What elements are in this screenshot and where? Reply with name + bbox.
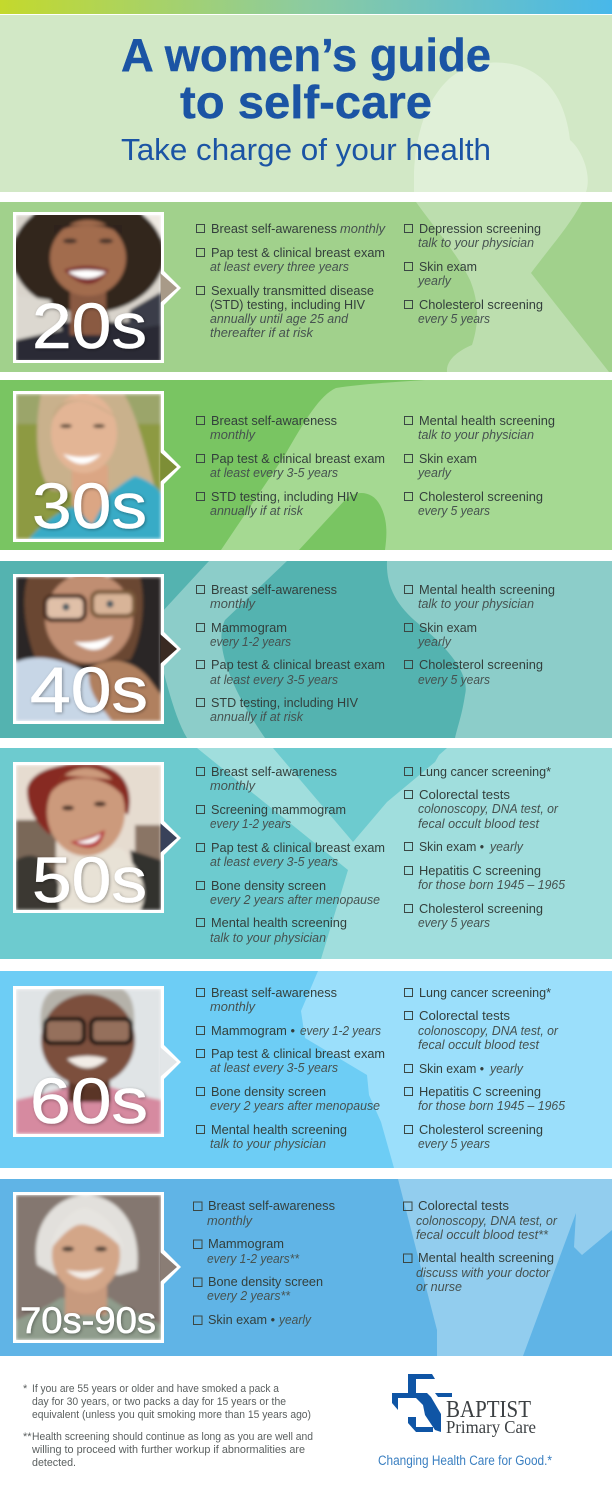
wordmark: BAPTIST [446, 1397, 531, 1423]
item: talk to your physician [418, 235, 534, 250]
checklist: 50s left [196, 764, 385, 945]
item: Breast self-awareness [208, 1198, 335, 1213]
item: Bone density screen [211, 878, 326, 893]
item [404, 787, 559, 831]
item [196, 764, 337, 793]
photo: woman in her 40s [13, 573, 181, 726]
silhouette: light shape [301, 971, 612, 1168]
item: talk to your physician [210, 930, 326, 945]
item: Pap test & clinical breast exam [211, 840, 385, 855]
footnote: lung cancer screening: day for 30 years, or two packs a day for 15 years or the [32, 1396, 286, 1408]
item: Pap test & clinical breast exam [211, 1046, 385, 1061]
item: Lung cancer screening* [419, 985, 551, 1000]
item: Cholesterol screening [419, 657, 543, 672]
item [404, 620, 477, 649]
subtitle: Take charge of your health [121, 132, 491, 167]
item: monthly [210, 778, 256, 793]
item: every 5 years [418, 1136, 490, 1151]
item: talk to your physician [418, 427, 534, 442]
top gradient bar [0, 0, 612, 14]
item [196, 489, 358, 518]
item: fecal occult blood test [418, 816, 540, 831]
item: every 5 years [418, 915, 490, 930]
item: Colorectal tests [419, 787, 511, 802]
item: yearly [278, 1312, 312, 1327]
footnote: health screening: ** [23, 1431, 32, 1443]
age label: 40s [30, 654, 148, 726]
item: colonoscopy, DNA test, or [418, 801, 559, 816]
footnote: health screening: willing to proceed with further workup if abnormalities are [31, 1444, 305, 1456]
item: Pap test & clinical breast exam [211, 451, 385, 466]
footnote: lung cancer screening: If you are 55 years or older and have smoked a pack a [32, 1383, 280, 1395]
footnote: health screening: detected. [32, 1457, 76, 1469]
silhouette: light shape [398, 1179, 612, 1356]
item [404, 451, 477, 480]
item: at least every 3-5 years [210, 854, 338, 869]
item: Mammogram [211, 620, 287, 635]
item [196, 1046, 385, 1075]
item: fecal occult blood test [418, 1037, 540, 1052]
item [404, 1084, 566, 1113]
age label: 50s [32, 844, 147, 916]
item [196, 878, 380, 907]
photo: woman in her 30s [13, 391, 181, 542]
item: every 1-2 years** [207, 1251, 300, 1266]
panel: 20s [0, 197, 612, 372]
item: Cholesterol screening [419, 297, 543, 312]
item [196, 915, 347, 945]
item: every 1-2 years [210, 634, 291, 649]
age label: 20s [32, 290, 147, 362]
item: monthly [207, 1213, 253, 1228]
item: Skin exam • [208, 1312, 275, 1327]
checklist: 40s left [196, 582, 385, 724]
item: thereafter if at risk [210, 325, 314, 340]
item: Mammogram [208, 1236, 284, 1251]
item: monthly [210, 427, 256, 442]
item: Breast self-awareness [211, 985, 337, 1000]
item: or nurse [416, 1279, 462, 1294]
footnote: lung cancer screening: equivalent (unless you quit smoking more than 15 years ago) [32, 1409, 311, 1421]
age label: 70s-90s [20, 1300, 156, 1341]
item [404, 863, 566, 892]
checklist: 40s right [404, 582, 555, 687]
item: Mental health screening [419, 582, 555, 597]
photo: woman in her 50s [13, 762, 181, 916]
item: every 1-2 years [210, 816, 291, 831]
item: STD testing, including HIV [211, 695, 358, 710]
item: for those born 1945 – 1965 [418, 1098, 566, 1113]
item: Hepatitis C screening [419, 1084, 541, 1099]
panel: 60s [0, 971, 612, 1168]
item: monthly [340, 221, 386, 236]
item: Pap test & clinical breast exam [211, 657, 385, 672]
item: yearly [417, 634, 452, 649]
footnote: lung cancer screening [23, 1383, 311, 1421]
footnote: health screening [23, 1431, 313, 1469]
silhouette: head in header [414, 63, 588, 192]
checklist: 70s right [404, 1198, 558, 1294]
item: Screening mammogram [211, 802, 346, 817]
silhouette: light shapes [150, 561, 612, 738]
item: annually if at risk [210, 503, 304, 518]
item: at least every three years [210, 259, 349, 274]
item [196, 985, 337, 1014]
title: to self-care [180, 76, 432, 128]
photo: woman in her 60s [13, 986, 181, 1137]
item: Breast self-awareness [211, 764, 337, 779]
item: at least every 3-5 years [210, 1060, 338, 1075]
item: every 2 years after menopause [210, 1098, 380, 1113]
item [404, 839, 524, 854]
checklist: 20s left [196, 221, 386, 340]
item: Bone density screen [208, 1274, 323, 1289]
item: every 5 years [418, 672, 490, 687]
item [404, 1061, 524, 1076]
item [196, 221, 386, 236]
item: Skin exam [419, 259, 477, 274]
item: Mental health screening [418, 1250, 554, 1265]
item: every 5 years [418, 503, 490, 518]
item: monthly [210, 596, 256, 611]
silhouette: light shapes [197, 748, 612, 959]
item [196, 1084, 380, 1113]
item: fecal occult blood test** [416, 1227, 549, 1242]
item: Bone density screen [211, 1084, 326, 1099]
item [404, 413, 555, 442]
item [404, 657, 543, 687]
item [404, 221, 541, 250]
checklist: 50s right [404, 764, 566, 930]
item: STD testing, including HIV [211, 489, 358, 504]
item: yearly [417, 465, 452, 480]
item: monthly [210, 999, 256, 1014]
logo: Baptist Primary Care [378, 1374, 553, 1468]
age label: 30s [32, 470, 147, 542]
item: Colorectal tests [419, 1008, 511, 1023]
item [196, 582, 337, 611]
panel: 50s [0, 748, 612, 959]
item [404, 582, 555, 611]
item: Colorectal tests [418, 1198, 510, 1213]
item: Cholesterol screening [419, 1122, 543, 1137]
item: Breast self-awareness [211, 221, 337, 236]
icon: cross and Florida [392, 1374, 452, 1432]
panel: 30s [0, 380, 612, 550]
silhouette: light shape [221, 380, 612, 550]
item: Lung cancer screening* [419, 764, 551, 779]
item: every 2 years** [207, 1288, 291, 1303]
item: Skin exam [419, 620, 477, 635]
item: Mental health screening [211, 1122, 347, 1137]
photo: woman in her 70s [13, 1192, 181, 1343]
item: Breast self-awareness [211, 582, 337, 597]
item [404, 1122, 543, 1151]
item: Skin exam • [419, 839, 484, 854]
item [404, 1008, 559, 1052]
item: Mental health screening [211, 915, 347, 930]
panel: header [0, 15, 612, 192]
item [196, 620, 291, 649]
item: Skin exam • [419, 1061, 484, 1076]
item: Sexually transmitted disease [211, 283, 374, 298]
item [196, 1122, 347, 1151]
silhouette: neck and shoulders [416, 202, 609, 372]
item [196, 840, 385, 869]
item: Skin exam [419, 451, 477, 466]
item [404, 901, 543, 930]
item: Mental health screening [419, 413, 555, 428]
panel: 40s [0, 561, 612, 738]
item [196, 283, 374, 340]
title [121, 29, 491, 128]
item [404, 1250, 554, 1294]
item: Breast self-awareness [211, 413, 337, 428]
item [404, 1198, 558, 1242]
item: at least every 3-5 years [210, 672, 338, 687]
item: Cholesterol screening [419, 901, 543, 916]
item: Mammogram • [211, 1023, 295, 1038]
item [196, 802, 346, 831]
item [196, 695, 358, 724]
age label: 60s [30, 1065, 148, 1137]
item: every 1-2 years [300, 1023, 381, 1038]
item: every 2 years after menopause [210, 892, 380, 907]
item: Depression screening [419, 221, 541, 236]
item: Hepatitis C screening [419, 863, 541, 878]
item: annually until age 25 and [210, 311, 349, 326]
item [194, 1274, 323, 1303]
item [196, 451, 385, 480]
item [196, 1023, 381, 1038]
item [196, 657, 385, 687]
photo: woman in her 20s [12, 197, 181, 363]
checklist: 30s right [404, 413, 555, 518]
wordmark [446, 1397, 536, 1437]
item [194, 1236, 300, 1266]
checklist: 60s right [404, 985, 566, 1151]
item: every 5 years [418, 311, 490, 326]
item [194, 1312, 312, 1327]
item: for those born 1945 – 1965 [418, 877, 566, 892]
item: yearly [417, 273, 452, 288]
item [196, 413, 337, 442]
item [194, 1198, 335, 1228]
item: Cholesterol screening [419, 489, 543, 504]
item [404, 489, 543, 518]
item: colonoscopy, DNA test, or [416, 1213, 558, 1228]
title: A women’s guide [121, 29, 491, 81]
item [196, 245, 385, 274]
item: at least every 3-5 years [210, 465, 338, 480]
item: yearly [489, 1061, 524, 1076]
item [404, 297, 543, 326]
tagline: Changing Health Care for Good.* [378, 1453, 553, 1468]
item: colonoscopy, DNA test, or [418, 1023, 559, 1038]
item [404, 259, 477, 288]
checklist: 30s left [196, 413, 385, 518]
item: talk to your physician [418, 596, 534, 611]
checklist: 70s left [194, 1198, 335, 1327]
item: yearly [489, 839, 524, 854]
wordmark: Primary Care [446, 1417, 536, 1437]
panel: 70s-90s [0, 1179, 612, 1356]
item: (STD) testing, including HIV [210, 297, 365, 312]
item: Pap test & clinical breast exam [211, 245, 385, 260]
checklist: 60s left [196, 985, 385, 1151]
item: talk to your physician [210, 1136, 326, 1151]
item: annually if at risk [210, 709, 304, 724]
footnote: health screening: Health screening should continue as long as you are well and [32, 1431, 313, 1443]
footnote: lung cancer screening: * [23, 1383, 28, 1395]
checklist: 20s right [404, 221, 543, 326]
item: discuss with your doctor [416, 1265, 551, 1280]
